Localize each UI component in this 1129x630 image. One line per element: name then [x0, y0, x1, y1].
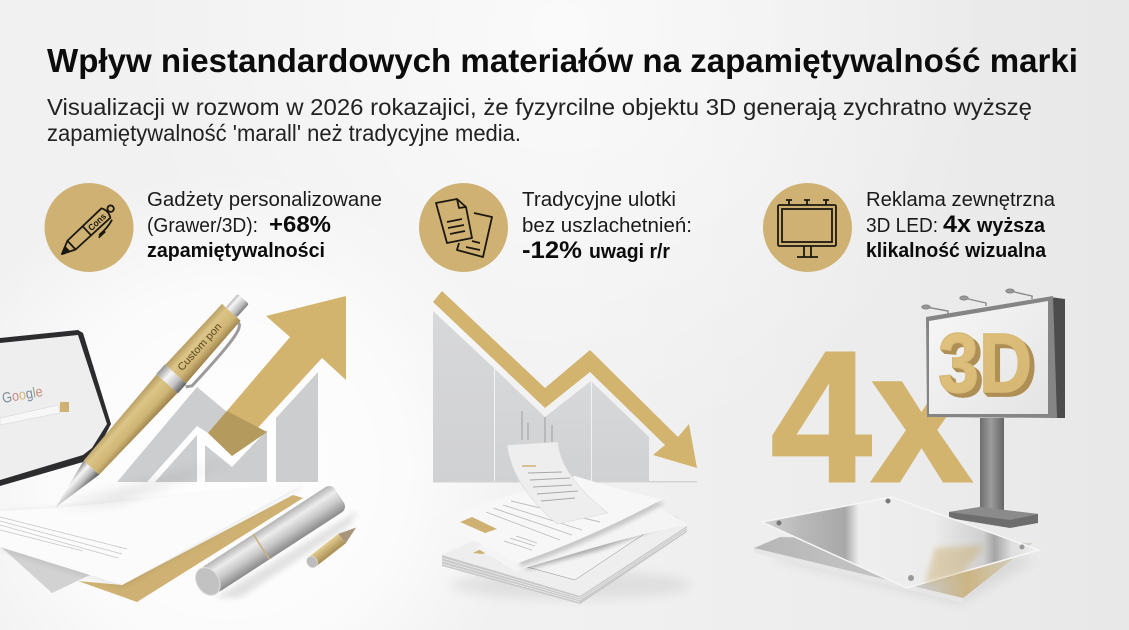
laptop with search page: [0, 330, 111, 486]
text: outdoor stat: wyższa: [976, 215, 1046, 237]
big 4x numeral: 4x: [771, 314, 972, 521]
subtitle: Visualizacji w rozwom w 2026 rokazajici, że fyzyrcilne objektu 3D generają zychratno wyższę: [47, 94, 1032, 120]
panel: traditional flyers: [419, 183, 692, 272]
grey declining chart: [433, 311, 649, 482]
billboard: [922, 289, 1065, 418]
text: outdoor stat: klikalność wizualna: [866, 240, 1047, 262]
top flyer: [430, 476, 663, 563]
grey growth chart: [117, 372, 318, 482]
text: gadgets stat: (Grawer/3D):: [147, 215, 258, 237]
lower metal plate: [754, 537, 1033, 603]
cylinder shadow: [215, 510, 358, 598]
icon: documents in gold circle: [419, 183, 508, 272]
text: flyers stat: bez uszlachetnień:: [522, 215, 692, 237]
text: outdoor stat: Reklama zewnętrzna: [866, 189, 1056, 211]
illustration: left scene: [0, 289, 360, 602]
text: outdoor stat: [866, 189, 1056, 262]
text: flyers stat: -12%: [522, 237, 582, 264]
icon: billboard in gold circle: [763, 183, 852, 272]
gold up arrow: [208, 296, 346, 456]
subtitle: zapamiętywalność 'marall' neż tradycyjne media.: [47, 120, 521, 146]
icon: pen in gold circle: Cons: [86, 211, 108, 233]
grey sheet: [0, 530, 90, 593]
engraved metal-and-gold pen: Custom pon: [175, 321, 225, 374]
laptop with search page: Google: [1, 384, 44, 407]
text: gadgets stat: Gadżety personalizowane: [147, 189, 382, 211]
illustration: right scene: [754, 289, 1065, 604]
text: flyers stat: uwagi r/r: [589, 241, 670, 263]
panel: personalized gadgets: [44, 183, 382, 272]
bottom flyer stack: [442, 500, 687, 604]
stack shadow: [450, 571, 690, 599]
metal cylinder: [190, 483, 348, 600]
letter shadow: [0, 486, 305, 588]
text: flyers stat: Tradycyjne ulotki: [522, 189, 676, 211]
middle flyer: [475, 495, 688, 571]
illustration: middle scene: [430, 291, 697, 604]
subtitle: [47, 94, 1032, 146]
text: outdoor stat: 3D LED:: [866, 215, 938, 237]
text: gadgets stat: [147, 189, 382, 262]
text: outdoor stat: 4x: [943, 211, 972, 238]
falling flyer: [507, 442, 608, 524]
upper acrylic metal plate: [762, 497, 1039, 588]
top flyer shadow: [520, 500, 665, 567]
sheet shadow: [525, 510, 680, 570]
text: gadgets stat: +68%: [269, 211, 331, 237]
text: gadgets stat: zapamiętywalności: [147, 240, 325, 262]
text: flyers stat: [522, 189, 692, 264]
panel: outdoor 3D LED: [763, 183, 1056, 272]
plates shadow: [770, 525, 1035, 604]
motion lines and small arrow: [522, 411, 552, 457]
gold down arrow: [433, 291, 697, 468]
white letter: [0, 483, 305, 585]
billboard post: [949, 418, 1038, 528]
gold sheet: [78, 495, 303, 602]
gold pencil: [304, 523, 360, 570]
title: Wpływ niestandardowych materiałów na zapamiętywalność marki: [47, 42, 1078, 79]
icon: pen in gold circle: [44, 183, 134, 272]
pen shadow: [56, 458, 240, 507]
chart baseline: [433, 481, 697, 482]
billboard lamps: [922, 289, 1032, 314]
3D letters: 3D: [938, 316, 1032, 410]
engraved metal-and-gold pen: [45, 289, 258, 521]
third flyer sheet: [500, 520, 650, 580]
